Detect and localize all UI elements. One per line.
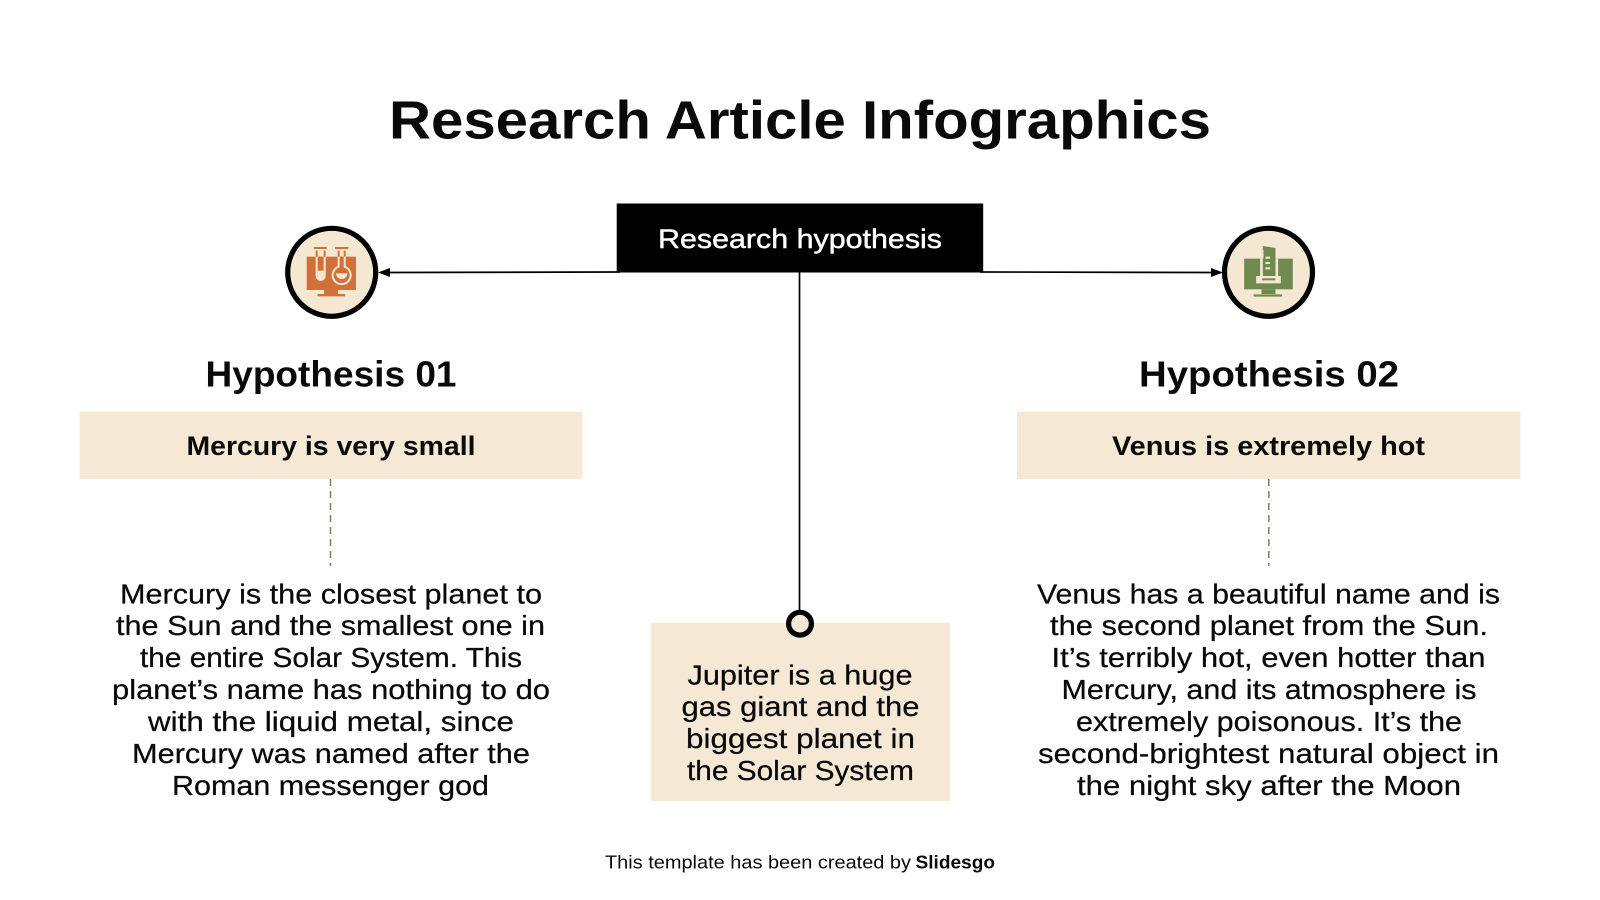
text block: mercury description: the entire Solar System. This bbox=[140, 642, 522, 673]
connector: horizontal arrow to hypothesis 01 bbox=[378, 268, 620, 277]
text block: jupiter description: biggest planet in bbox=[686, 723, 915, 754]
text block: venus description: the night sky after the Moon bbox=[1077, 770, 1461, 801]
subheading box: venus: Venus is extremely hot bbox=[1112, 431, 1425, 461]
panel: hypothesis 02 bbox=[1017, 354, 1520, 801]
icon: graduated cylinder on monitor bbox=[1224, 228, 1312, 316]
title: Research Article Infographics bbox=[389, 90, 1211, 150]
text block: venus description: Venus has a beautiful name and is bbox=[1037, 578, 1500, 609]
text block: mercury description: Mercury was named after the bbox=[132, 738, 530, 769]
footer credit: This template has been created by bbox=[605, 852, 911, 872]
icon: test tubes on monitor bbox=[288, 228, 376, 316]
text block: mercury description: Mercury is the closest planet to bbox=[120, 578, 542, 609]
text block: jupiter description bbox=[682, 659, 920, 786]
text block: jupiter description: Jupiter is a huge bbox=[688, 659, 912, 690]
text block: mercury description: the Sun and the smallest one in bbox=[116, 610, 545, 641]
heading: hypothesis 02: Hypothesis 02 bbox=[1139, 354, 1399, 394]
footer credit: Slidesgo bbox=[916, 852, 995, 872]
text block: mercury description: Roman messenger god bbox=[172, 770, 489, 801]
text block: mercury description: planet’s name has nothing to do bbox=[112, 674, 550, 705]
text block: mercury description: with the liquid metal, since bbox=[147, 706, 514, 737]
text block: mercury description bbox=[112, 578, 550, 801]
text block: venus description bbox=[1037, 578, 1500, 801]
dashed connector bbox=[1268, 479, 1270, 566]
subheading box: mercury bbox=[80, 412, 582, 479]
root box: research hypothesis bbox=[617, 204, 983, 272]
text block: venus description: It’s terribly hot, even hotter than bbox=[1052, 642, 1486, 673]
text block: venus description: extremely poisonous. It’s the bbox=[1076, 706, 1462, 737]
connector: horizontal arrow to hypothesis 02 bbox=[980, 268, 1223, 277]
subheading box: venus bbox=[1017, 412, 1520, 479]
panel: jupiter box bbox=[651, 623, 950, 801]
text block: venus description: second-brightest natural object in bbox=[1038, 738, 1499, 769]
dashed connector bbox=[330, 479, 332, 566]
subheading box: mercury: Mercury is very small bbox=[186, 431, 476, 461]
root box: research hypothesis: Research hypothesis bbox=[658, 224, 942, 254]
text block: venus description: Mercury, and its atmosphere is bbox=[1062, 674, 1476, 705]
connector end dot bbox=[789, 612, 811, 635]
text block: jupiter description: the Solar System bbox=[687, 755, 914, 786]
heading: hypothesis 01: Hypothesis 01 bbox=[206, 354, 456, 394]
connector: vertical line to Jupiter box bbox=[798, 270, 800, 612]
text block: venus description: the second planet from the Sun. bbox=[1050, 610, 1488, 641]
text block: jupiter description: gas giant and the bbox=[682, 691, 920, 722]
panel: hypothesis 01 bbox=[80, 354, 582, 801]
